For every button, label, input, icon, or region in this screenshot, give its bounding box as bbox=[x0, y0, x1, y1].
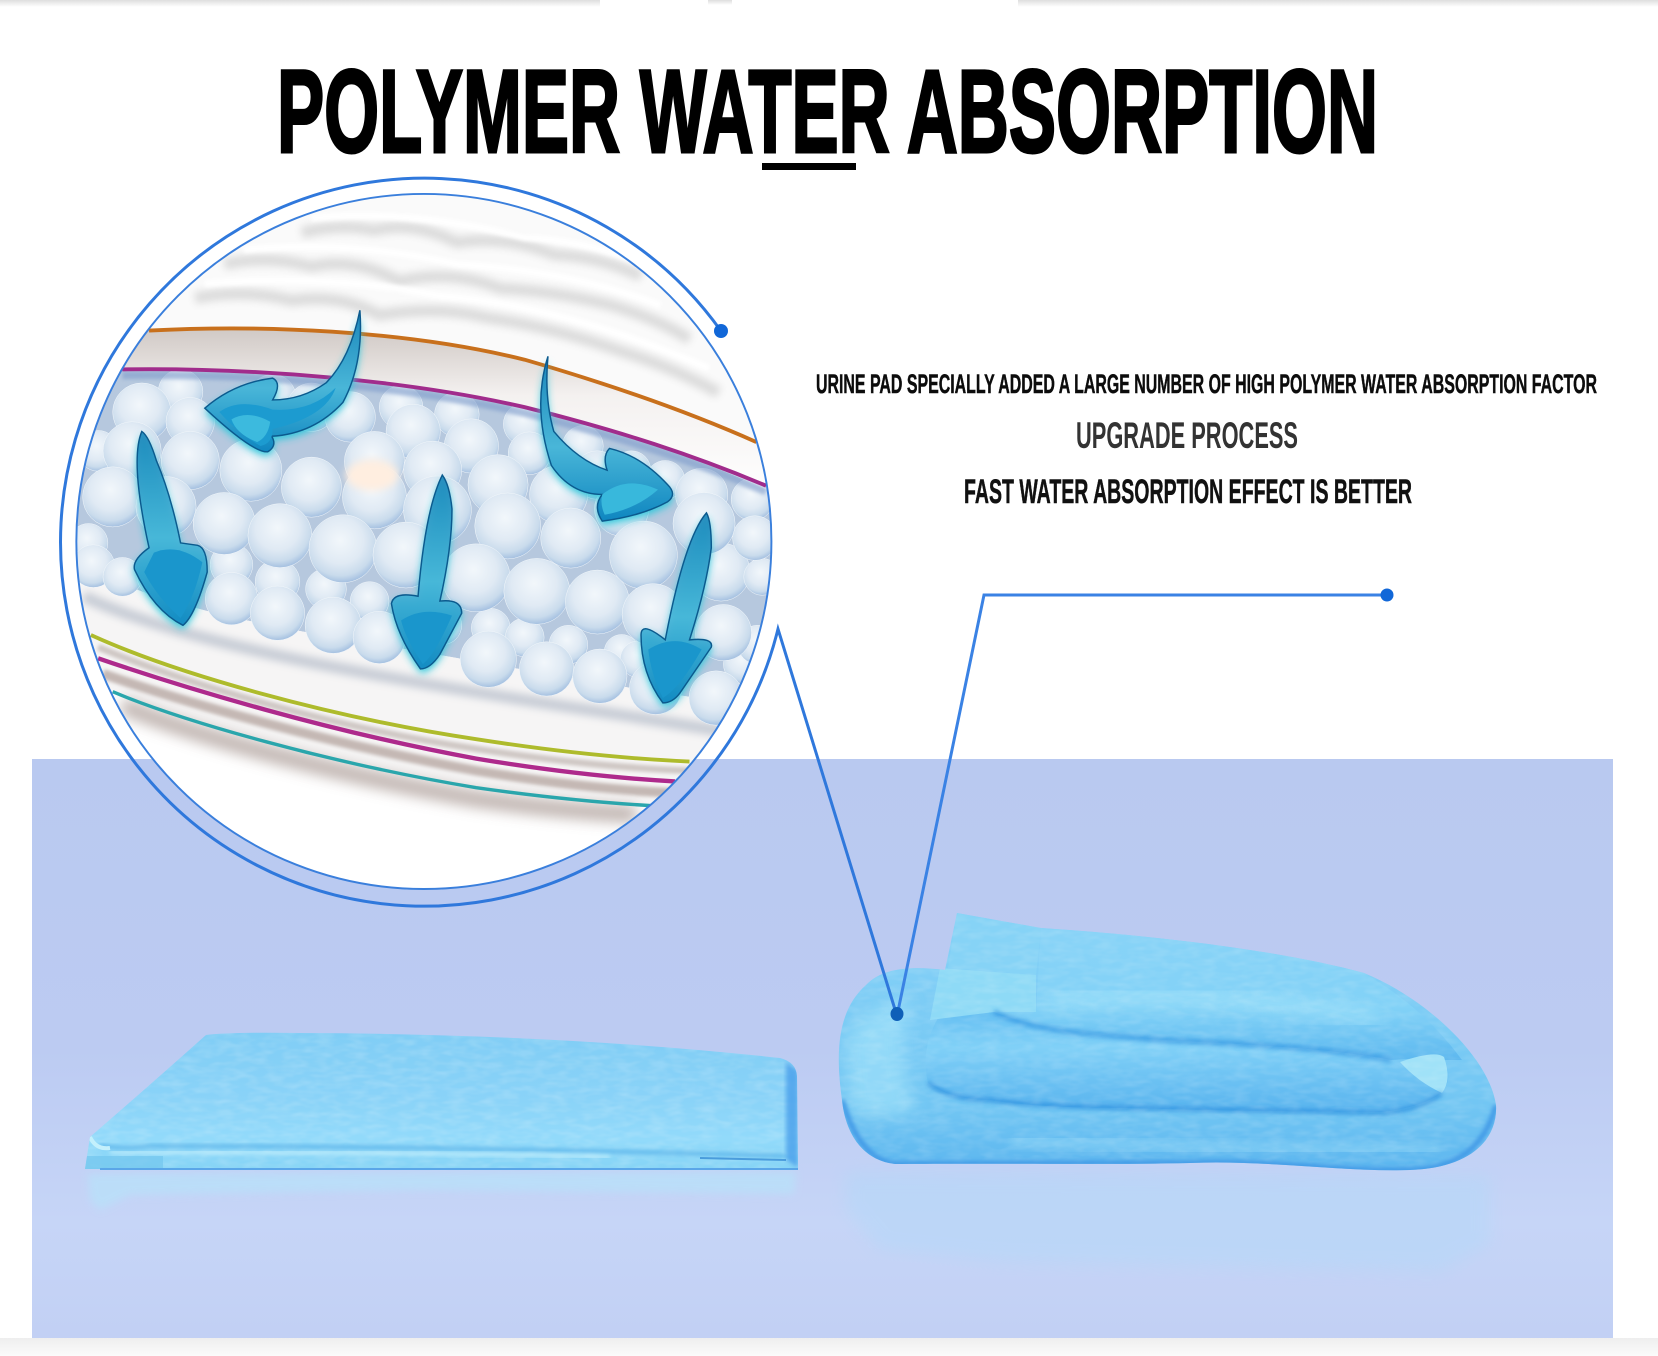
bead glow bbox=[345, 460, 399, 491]
arrow: lower right bbox=[641, 513, 712, 707]
arrow: upper left bbox=[205, 310, 361, 456]
top quilted sheet bbox=[190, 220, 724, 400]
magnified cross-section lens bbox=[69, 194, 782, 897]
purple layer line bbox=[122, 369, 766, 486]
orange layer line bbox=[149, 328, 756, 442]
arrow: upper right bbox=[541, 356, 673, 525]
shadow under teal bbox=[122, 705, 636, 814]
illustration: rolled pad bbox=[835, 910, 1500, 1175]
gap layer under orange line bbox=[124, 330, 766, 490]
top edge strips bbox=[0, 0, 1658, 7]
upper bead shadow bbox=[122, 375, 766, 492]
callout: connector ring and leader lines bbox=[61, 178, 1393, 1021]
white under teal bbox=[113, 694, 646, 838]
bead layer lower shadow bbox=[84, 596, 757, 737]
lower sheet bbox=[80, 584, 711, 804]
below olive layers bbox=[98, 647, 689, 793]
text block: description: UPGRADE PROCESS bbox=[1076, 415, 1298, 456]
bead layer background bbox=[69, 369, 782, 708]
beads bbox=[69, 369, 781, 725]
olive, magenta, teal lines bbox=[91, 635, 689, 806]
lens inner ring bbox=[76, 194, 771, 889]
reflection: flat pad bbox=[88, 1172, 796, 1210]
text block: description bbox=[816, 369, 1597, 511]
arrow: lower left bbox=[134, 431, 207, 629]
reflection: rolled pad bbox=[845, 1172, 1490, 1272]
arrow: lower center bbox=[391, 475, 462, 673]
bottom page strip bbox=[0, 1338, 1658, 1356]
lens base bbox=[77, 194, 771, 889]
illustration: folded flat pad bbox=[85, 1030, 800, 1170]
panel: blue floor background bbox=[32, 759, 1613, 1338]
